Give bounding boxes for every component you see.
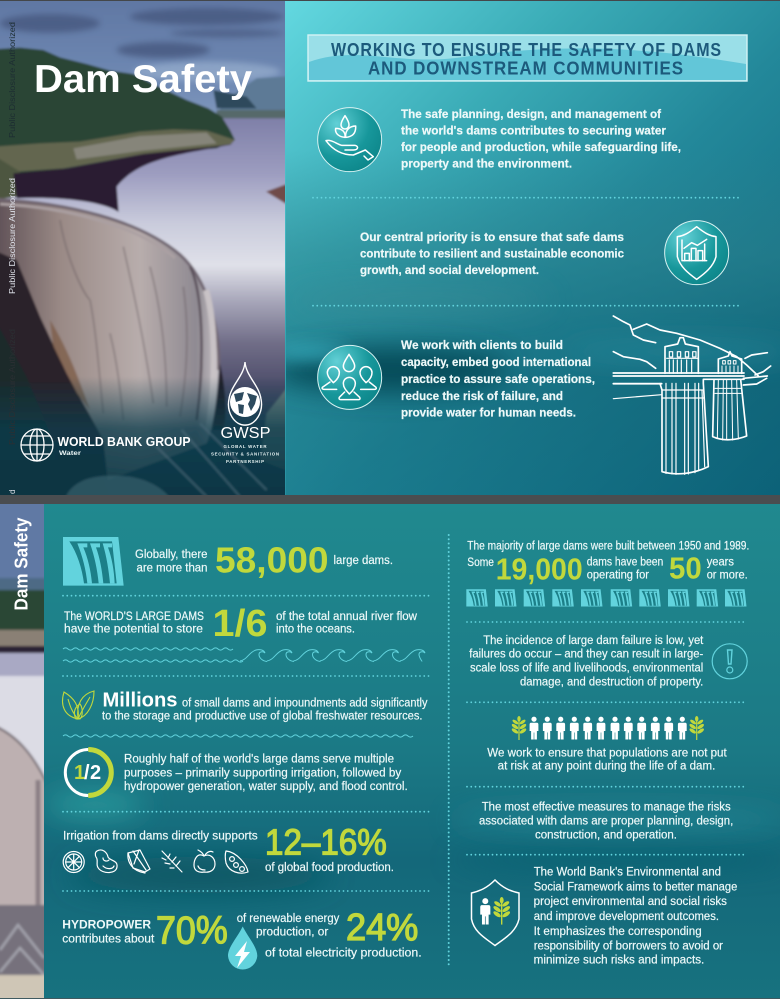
logo: World Bank Group: WORLD BANK GROUP xyxy=(58,434,191,449)
heading box: WORKING TO ENSURE THE SAFETY OF DAMS xyxy=(331,40,722,60)
text block: environmental and social framework: Social Framework aims to better manage xyxy=(534,881,737,893)
text block: half of dams xyxy=(124,754,408,793)
icon: half ring: / xyxy=(84,762,90,784)
stat: one sixth of river flow xyxy=(64,603,418,645)
panel: side photo strip xyxy=(0,504,44,998)
illustration: dam towers line drawing xyxy=(613,316,771,474)
stat: millions of small dams: of small dams and impoundments add significantly xyxy=(182,698,428,710)
text block: populations xyxy=(487,747,727,773)
stat: 19,000 dams over 50 years: 50 xyxy=(669,551,702,586)
stat: 58,000 large dams: Globally, there xyxy=(135,549,208,561)
icon: half ring: 2 xyxy=(90,762,101,784)
text block: environmental and social framework xyxy=(534,866,737,967)
text block: working with clients: reduce the risk of failure, and xyxy=(401,391,563,403)
divider: column xyxy=(448,535,450,968)
stat: hydropower share: of renewable energy xyxy=(237,913,340,925)
stat: hydropower share: production, or xyxy=(256,927,328,939)
stat: 58,000 large dams: are more than xyxy=(136,562,208,574)
stat: 19,000 dams over 50 years: operating for xyxy=(587,570,649,582)
stat: millions of small dams: Millions xyxy=(102,690,178,712)
stat: 19,000 dams over 50 years: The majority of large dams were built between 1950 and 1989. xyxy=(467,541,749,553)
icon: hand holding plant xyxy=(318,108,382,172)
stat: hydropower share: of total electricity production. xyxy=(265,948,422,960)
stat: one sixth of river flow: have the potential to store xyxy=(64,624,203,636)
icon: people and water drop xyxy=(318,345,382,409)
text block: effective measures: The most effective measures to manage the risks xyxy=(482,802,731,814)
stat: one sixth of river flow: The WORLD'S LARGE DAMS xyxy=(64,611,204,623)
waves graphic xyxy=(63,648,425,662)
text block: dam failure xyxy=(469,635,704,688)
text block: effective measures: construction, and operation. xyxy=(535,829,677,841)
stat: 19,000 dams over 50 years: or more. xyxy=(707,570,748,582)
icon: water drop with lightning xyxy=(228,926,257,969)
stat: one sixth of river flow: into the oceans. xyxy=(276,624,355,636)
text block: central priority: growth, and social development. xyxy=(360,265,539,277)
text block: environmental and social framework: minimize such risks and impacts. xyxy=(534,955,704,967)
panel: working to ensure safety xyxy=(270,1,780,495)
stat: 19,000 dams over 50 years: 19,000 xyxy=(496,551,583,586)
icon: shield with person and crop xyxy=(472,880,519,946)
text block: safe planning: The safe planning, design, and management of xyxy=(401,109,661,121)
icons: row of ten dams xyxy=(466,589,746,607)
text block: half of dams: Roughly half of the world's large dams serve multiple xyxy=(124,754,394,766)
stat: one sixth of river flow: of the total annual river flow xyxy=(276,611,418,623)
text block: environmental and social framework: responsibility of borrowers to avoid or xyxy=(534,940,723,952)
stat: 19,000 dams over 50 years: years xyxy=(707,557,734,569)
icon: warning circle xyxy=(712,644,747,679)
stat: irrigation share xyxy=(63,821,394,874)
text block: populations: We work to ensure that populations are not put xyxy=(487,747,727,759)
text block: safe planning xyxy=(401,109,681,170)
heading box xyxy=(308,35,747,81)
stat: 58,000 large dams: large dams. xyxy=(334,555,393,567)
stat: irrigation share: of global food production. xyxy=(265,862,394,874)
text block: environmental and social framework: project environmental and social risks xyxy=(534,896,727,908)
stat: 19,000 dams over 50 years xyxy=(467,541,749,586)
side label: Public Disclosure Authorized xyxy=(8,329,17,445)
text block: half of dams: purposes – primarily supporting irrigation, followed by xyxy=(124,767,402,779)
text block: effective measures xyxy=(479,802,733,841)
side label fragment: d xyxy=(8,490,17,494)
text block: dam failure: failures do occur – and they can result in large- xyxy=(469,649,703,661)
text block: working with clients: practice to assure safe operations, xyxy=(401,374,595,386)
text block: safe planning: for people and production, while safeguarding life, xyxy=(401,142,681,154)
heading box: AND DOWNSTREAM COMMUNITIES xyxy=(368,59,684,79)
logo: World Bank Group: Water xyxy=(59,450,82,457)
stat: hydropower share: 24% xyxy=(346,907,418,949)
text block: working with clients: provide water for human needs. xyxy=(401,408,576,420)
cover title: Dam Safety xyxy=(34,58,252,101)
stat: one sixth of river flow: 1/6 xyxy=(212,603,268,645)
stat: millions of small dams: to the storage and productive use of global freshwater resources. xyxy=(102,711,422,723)
icon: large dam xyxy=(63,537,124,586)
panel: cover photo xyxy=(0,0,293,507)
text block: dam failure: The incidence of large dam failure is low, yet xyxy=(483,635,704,647)
text block: working with clients xyxy=(401,340,595,420)
logo: GWSP: PARTNERSHIP xyxy=(226,459,264,464)
icons: people between crops xyxy=(511,716,705,740)
side label: Public Disclosure Authorized xyxy=(8,178,17,294)
stat: hydropower share: 70% xyxy=(156,909,228,952)
logo: GWSP: SECURITY & SANITATION xyxy=(211,452,279,457)
stat: irrigation share: 12–16% xyxy=(265,821,387,862)
text block: environmental and social framework: and improve development outcomes. xyxy=(534,911,719,923)
icon: shield with chart xyxy=(665,221,729,285)
stat: 19,000 dams over 50 years: dams have been xyxy=(587,557,663,569)
stat: irrigation share: Irrigation from dams directly supports xyxy=(63,831,258,843)
stat: 58,000 large dams xyxy=(135,540,393,580)
text block: safe planning: the world's dams contributes to securing water xyxy=(401,126,667,138)
logo: GWSP: GWSP xyxy=(220,425,270,442)
panel: key facts xyxy=(44,504,780,999)
stat: millions of small dams xyxy=(102,690,428,723)
stat: 58,000 large dams: 58,000 xyxy=(215,540,328,580)
text block: dam failure: damage, and destruction of property. xyxy=(520,676,703,688)
text block: safe planning: property and the environment. xyxy=(401,158,572,170)
side label: Public Disclosure Authorized xyxy=(8,22,17,138)
text block: environmental and social framework: It emphasizes the corresponding xyxy=(534,926,702,938)
text block: central priority xyxy=(360,232,625,277)
text block: working with clients: We work with clients to build xyxy=(401,340,563,352)
logo: World Bank Group xyxy=(21,429,191,461)
side title: Dam Safety xyxy=(12,518,32,610)
text block: effective measures: associated with dams are proper planning, design, xyxy=(479,816,733,828)
text block: central priority: contribute to resilient and sustainable economic xyxy=(360,248,625,260)
text block: dam failure: scale loss of life and livelihoods, environmental xyxy=(470,662,703,674)
icon: half ring: 1 xyxy=(74,762,85,784)
text block: environmental and social framework: The World Bank's Environmental and xyxy=(534,866,721,878)
text block: half of dams: hydropower generation, water supply, and flood control. xyxy=(124,781,408,793)
stat: hydropower share: contributes about xyxy=(62,933,155,945)
logo: GWSP: GLOBAL WATER xyxy=(224,444,267,449)
icons: food crops xyxy=(63,850,248,873)
stat: hydropower share: HYDROPOWER xyxy=(62,919,152,931)
text block: central priority: Our central priority is to ensure that safe dams xyxy=(360,232,624,244)
stat: hydropower share xyxy=(62,907,422,960)
text block: working with clients: capacity, embed good international xyxy=(401,357,591,369)
logo: GWSP xyxy=(211,362,279,464)
text block: populations: at risk at any point during the life of a dam. xyxy=(498,761,715,773)
icon: leaves xyxy=(63,691,94,719)
stat: 19,000 dams over 50 years: Some xyxy=(467,557,494,569)
icon: half ring xyxy=(65,750,111,796)
